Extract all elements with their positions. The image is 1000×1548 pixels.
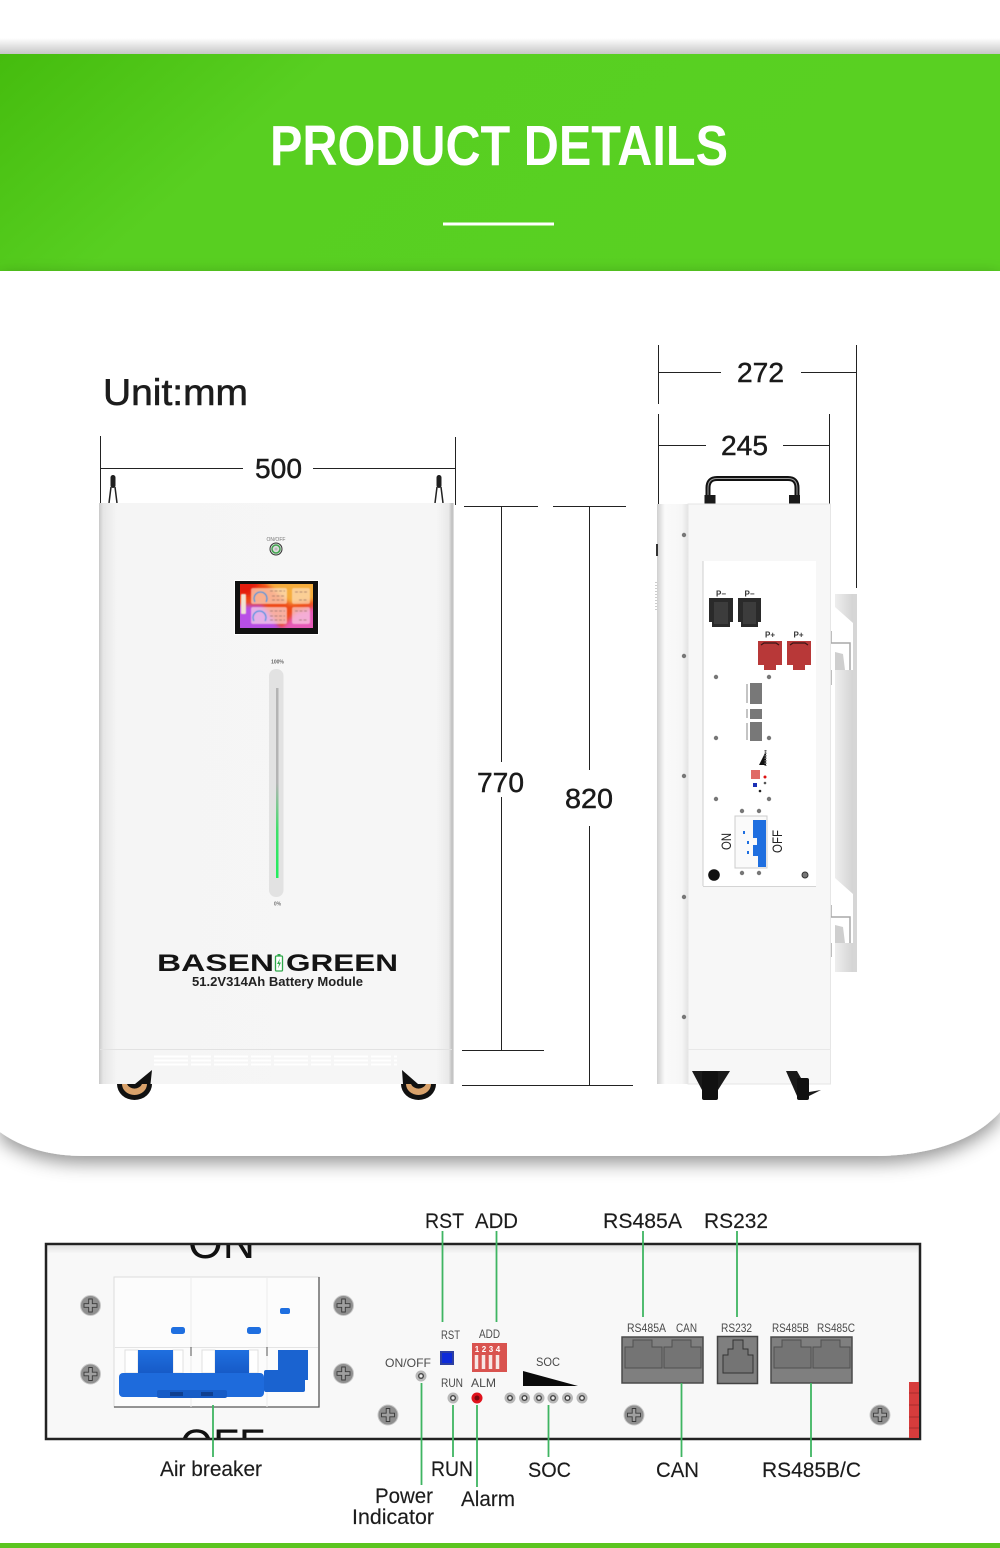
power button: ON/OFF xyxy=(267,537,285,543)
callout labels: Indicator xyxy=(352,1505,434,1529)
port: rs232 xyxy=(718,1336,758,1384)
panel printed labels: ALM xyxy=(471,1376,496,1390)
callout labels: RS232 xyxy=(704,1209,768,1233)
side front-edge strip xyxy=(656,504,688,1084)
panel printed labels: RUN xyxy=(441,1376,463,1390)
breaker blue toggle xyxy=(119,1350,308,1398)
dimension: depth 245: 245 xyxy=(721,430,768,461)
breaker off label: OFF xyxy=(769,830,785,853)
mini breaker xyxy=(735,816,767,868)
dimension: height 820 xyxy=(462,506,633,1086)
positive terminals: P+ xyxy=(765,630,775,640)
icon: side left wheel xyxy=(692,1071,730,1100)
callout labels: RS485B/C xyxy=(762,1458,861,1482)
address dip switch: 2 xyxy=(482,1345,487,1354)
wall bracket xyxy=(831,594,857,972)
unit label: Unit:mm xyxy=(103,371,248,413)
air breaker xyxy=(114,1277,319,1407)
side cabinet body xyxy=(688,504,830,1084)
callout labels: SOC xyxy=(528,1458,571,1482)
leader lines xyxy=(213,1231,811,1487)
dimension: height 770: 770 xyxy=(477,767,524,798)
address dip switch xyxy=(472,1343,507,1372)
panel printed labels: RS485B xyxy=(772,1321,809,1335)
dimension: width 500: 500 xyxy=(255,453,302,484)
side edge screws xyxy=(682,533,686,1019)
callout labels: RST xyxy=(425,1209,464,1233)
side view of battery cabinet xyxy=(656,478,857,1100)
icon: side right wheel xyxy=(786,1071,821,1100)
icon: left wheel xyxy=(117,1070,152,1100)
icon: side carry handle xyxy=(704,478,800,504)
negative terminals: P− xyxy=(716,590,726,598)
state of charge light bar: 0% xyxy=(274,902,282,908)
model name: 51.2V314Ah Battery Module xyxy=(192,974,363,989)
indicators and switches xyxy=(751,750,766,792)
brand logo: GREEN xyxy=(286,950,398,977)
dimension: height 770 xyxy=(462,506,544,1050)
address dip switch: 4 xyxy=(496,1345,501,1354)
state of charge light bar xyxy=(269,660,284,908)
panel printed labels: ON/OFF xyxy=(385,1356,431,1370)
dimension: width 500 xyxy=(100,436,456,505)
brand logo xyxy=(157,950,398,977)
title underline xyxy=(443,222,554,226)
touch screen xyxy=(234,580,320,634)
ports: rs485a and can xyxy=(622,1337,703,1383)
callout labels: Power xyxy=(375,1484,433,1508)
detail panel: control interfaces xyxy=(44,1242,922,1440)
address dip switch: 1 xyxy=(475,1345,480,1354)
red terminal strip xyxy=(909,1382,919,1438)
negative terminals xyxy=(709,590,761,627)
soc gauge xyxy=(504,1371,588,1404)
callout labels: CAN xyxy=(656,1458,699,1482)
power button xyxy=(267,537,285,555)
brand logo: BASEN xyxy=(157,950,274,977)
reset button xyxy=(440,1351,454,1365)
callout labels: Alarm xyxy=(461,1487,515,1511)
cabinet base with vents xyxy=(100,1049,452,1064)
callout labels: Air breaker xyxy=(160,1457,262,1481)
side connection panel xyxy=(703,561,816,886)
breaker on label: ON xyxy=(718,833,734,850)
callout labels xyxy=(160,1209,861,1529)
header banner xyxy=(0,54,1000,271)
callout labels: ADD xyxy=(475,1209,518,1233)
cabinet body xyxy=(99,503,454,1084)
panel screws xyxy=(714,675,771,875)
panel printed labels: RS485A xyxy=(627,1321,666,1335)
white product panel with rounded lower corners xyxy=(0,271,1000,1156)
panel printed labels: SOC xyxy=(536,1355,560,1369)
dimension: depth 272: 272 xyxy=(737,357,784,388)
front view of battery cabinet xyxy=(99,475,454,1100)
positive terminals: P+ xyxy=(793,630,804,640)
communication ports xyxy=(746,683,762,741)
ports: rs485b and rs485c xyxy=(771,1337,852,1383)
panel printed labels: CAN xyxy=(676,1321,697,1335)
address dip switch: 3 xyxy=(489,1345,494,1354)
status lights xyxy=(416,1370,482,1404)
clipped on and off captions: ON xyxy=(188,1217,255,1268)
positive terminals xyxy=(758,630,811,670)
dimension: height 820: 820 xyxy=(565,783,613,814)
clipped on and off captions: OFF xyxy=(180,1421,265,1469)
icon: black knob xyxy=(708,869,720,881)
panel printed labels xyxy=(385,1321,855,1390)
panel printed labels: RS485C xyxy=(817,1321,855,1335)
icon: right hanging hook xyxy=(435,475,443,503)
callout labels: RS485A xyxy=(603,1209,683,1233)
breaker white tabs xyxy=(125,1350,258,1373)
icon: battery xyxy=(276,954,282,971)
icon: ground terminal xyxy=(802,872,808,878)
icon: left hanging hook xyxy=(109,475,117,503)
state of charge light bar: 100% xyxy=(271,660,284,666)
callout labels: RUN xyxy=(431,1457,473,1481)
dimension: depth 245 xyxy=(658,414,830,504)
bottom green bar xyxy=(0,1543,1000,1548)
breaker indicator windows xyxy=(171,1308,290,1334)
title: PRODUCT DETAILS xyxy=(270,114,728,178)
panel printed labels: RST xyxy=(441,1328,461,1342)
icon: right wheel xyxy=(401,1070,436,1100)
panel screws xyxy=(80,1296,890,1425)
panel printed labels: ADD xyxy=(479,1327,500,1341)
negative terminals: P− xyxy=(744,590,755,598)
panel printed labels: RS232 xyxy=(721,1321,752,1335)
dimension: depth 272 xyxy=(658,345,856,588)
clipped on and off captions xyxy=(183,1245,919,1438)
